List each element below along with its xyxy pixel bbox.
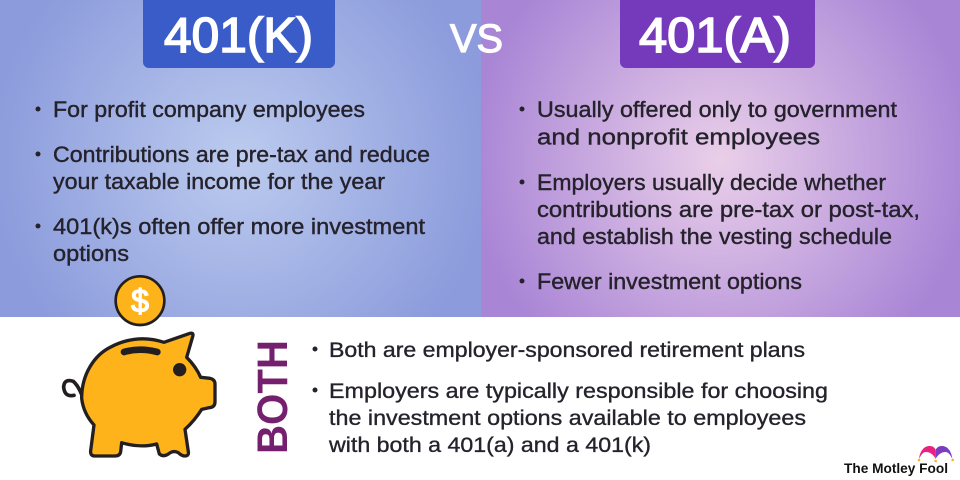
panel: 401(k) background	[0, 0, 481, 317]
icon: pig	[64, 333, 215, 456]
text block: 401(a) bullets: and establish the vesting schedule	[537, 224, 892, 249]
text block: both bullets: with both a 401(a) and a 401(k)	[328, 433, 651, 457]
heading: both: BOTH	[249, 340, 297, 454]
text block: 401(a) bullets: contributions are pre-tax or post-tax,	[537, 197, 920, 222]
heading: vs: VS	[450, 17, 503, 61]
icon: coin	[116, 276, 164, 325]
text block: 401(a) bullets: Employers usually decide whether	[537, 170, 887, 195]
text block: 401(a) bullets: Fewer investment options	[537, 269, 802, 294]
text block: 401(k) bullets: options	[53, 241, 129, 266]
heading: 401(k): 401(K)	[164, 9, 313, 63]
text block: 401(k) bullets	[36, 97, 430, 266]
heading: 401(k)	[143, 0, 335, 68]
logo: The Motley Fool	[844, 446, 954, 476]
text block: both bullets: the investment options available to employees	[329, 406, 806, 430]
icon: coin: $	[131, 283, 149, 319]
text block: 401(a) bullets: and nonprofit employees	[537, 124, 820, 150]
text block: 401(a) bullets	[520, 97, 920, 294]
text block: both bullets	[312, 338, 828, 457]
icon: piggy bank with coin	[64, 276, 215, 456]
panel: 401(a) background	[481, 0, 960, 317]
text block: 401(k) bullets: 401(k)s often offer more investment	[53, 214, 426, 239]
panel: both background	[0, 317, 960, 480]
text block: 401(k) bullets: your taxable income for the year	[53, 169, 386, 194]
text block: both bullets: Both are employer-sponsored retirement plans	[329, 338, 805, 362]
heading: 401(a)	[620, 0, 815, 68]
text block: 401(k) bullets: Contributions are pre-tax and reduce	[53, 142, 430, 167]
text block: both bullets: Employers are typically responsible for choosing	[329, 379, 828, 403]
logo: The Motley Fool: The Motley Fool	[844, 460, 948, 476]
text block: 401(k) bullets: For profit company employees	[53, 97, 365, 122]
heading: 401(a): 401(A)	[639, 9, 791, 63]
icon: jester hat	[918, 446, 954, 462]
text block: 401(a) bullets: Usually offered only to government	[537, 97, 898, 122]
